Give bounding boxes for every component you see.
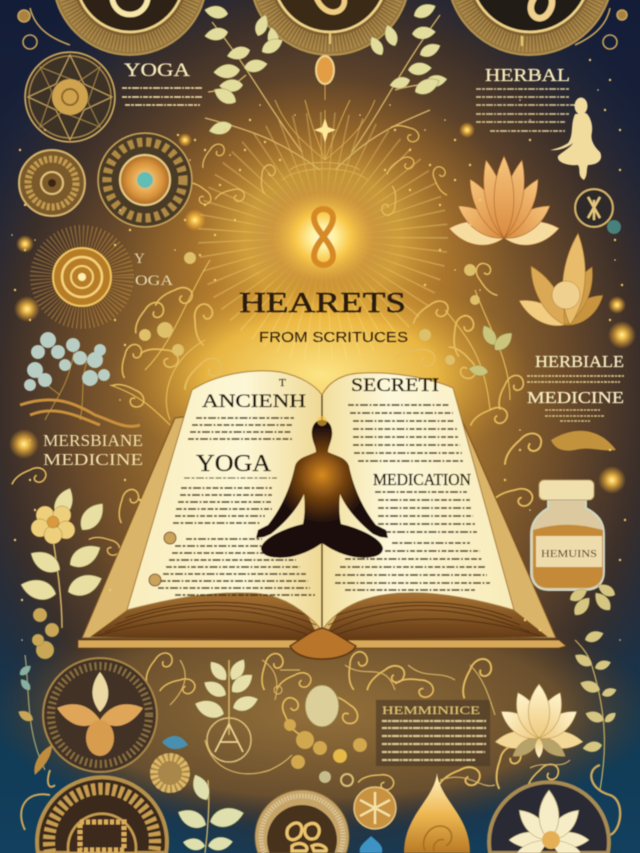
icon: small wheel — [354, 787, 396, 829]
left page text lines — [158, 418, 315, 595]
top medallions — [53, 0, 613, 55]
medallion: yoga star — [25, 52, 115, 142]
book cover — [78, 640, 566, 648]
flower seed head — [150, 753, 190, 793]
book headings: SECRETI — [351, 376, 439, 396]
bottom medallion: glyph — [255, 790, 349, 853]
root decoration right — [551, 431, 616, 451]
back pages — [82, 400, 556, 638]
open book — [78, 371, 566, 659]
flowers: pale blue cluster — [24, 332, 110, 420]
bottom seed — [305, 685, 339, 727]
sun rays and central glow — [245, 167, 401, 307]
bottom medallion: engraved seal — [37, 777, 167, 853]
page stack right — [323, 591, 548, 640]
icon: golden oil drop — [404, 773, 470, 853]
foliage: right side — [567, 581, 618, 790]
text block: herbal caption — [476, 89, 575, 131]
book headings: YOGA — [196, 451, 272, 477]
glowing orbs — [9, 122, 636, 494]
note heading: HEMMINIICE — [382, 703, 480, 717]
gutter — [321, 395, 323, 632]
icon: blue ornament — [360, 836, 382, 853]
heading: herbal: HERBAL — [485, 65, 570, 85]
heading: mersbiane medicine left: MEDICINE — [43, 450, 143, 469]
page stack left — [90, 591, 320, 640]
scroll ornament right — [591, 765, 620, 835]
gold floral cluster — [284, 719, 367, 786]
page edge lines — [97, 602, 540, 638]
bottom plant with emblem — [192, 656, 292, 774]
icon: orange lotus — [447, 156, 561, 249]
icon: seated cream figure — [550, 98, 601, 180]
golden dust and sparkles — [12, 60, 625, 640]
icon: small round symbol — [575, 189, 613, 227]
meditating silhouette — [256, 416, 388, 558]
icon: golden lotus — [515, 232, 608, 333]
text block: yoga caption — [122, 88, 203, 105]
bottom right lotus — [494, 684, 584, 762]
gold filigree scrolls — [12, 119, 560, 804]
medallion: top left — [53, 0, 207, 55]
heading: herbiale medicine right — [527, 352, 624, 421]
medallion: top right — [447, 0, 613, 55]
right page text lines — [335, 405, 490, 590]
heading: herbiale medicine right: MEDICINE — [527, 388, 624, 407]
corner ornaments — [18, 8, 627, 49]
heading: mersbiane medicine left: MERSBIANE — [43, 431, 143, 450]
medallion: top centre — [250, 0, 410, 55]
medallion: small mandala — [19, 150, 85, 216]
heading: herbiale medicine right: HERBIALE — [535, 352, 624, 371]
subtitle: FROM SCRITUCES — [259, 329, 408, 346]
bottom scattered ornaments — [170, 660, 570, 786]
medallion: turquoise eye — [98, 133, 192, 227]
label: split yoga: OGA — [135, 273, 173, 289]
medallion: glowing sun disc — [42, 237, 122, 317]
heading: mersbiane medicine left — [43, 431, 143, 469]
vines and leaves: right branch — [335, 0, 448, 170]
icon: blue bird — [162, 736, 188, 749]
root decoration left — [20, 400, 140, 426]
book headings — [196, 376, 471, 489]
book headings: ANCIENH — [202, 391, 306, 412]
bottom medallion: white lotus — [489, 782, 609, 853]
heading: yoga: YOGA — [124, 61, 191, 81]
title: heart secrets: HEARETS — [239, 288, 406, 319]
vines and leaves: left branch — [203, 4, 320, 170]
plant: left flowering leaves — [18, 485, 109, 628]
jar of herbal powder — [531, 480, 604, 590]
bottom medallion: orchid — [43, 658, 157, 772]
foliage: left side — [16, 608, 59, 830]
label: split yoga: Y — [134, 251, 145, 267]
text block: bottom herbal note — [376, 700, 490, 766]
foliage: gold vines beside title — [110, 252, 516, 425]
book headings: MEDICATION — [373, 470, 471, 489]
leaves: bottom centre plant — [175, 772, 246, 853]
right page — [322, 373, 514, 630]
clasp — [290, 628, 356, 659]
jar label: HEMUINS — [541, 548, 597, 560]
central ornament and fan — [275, 56, 375, 180]
small seals on pages — [149, 532, 176, 586]
label: split yoga — [134, 251, 173, 289]
icon: central infinity symbol — [314, 209, 333, 265]
book headings: T — [279, 377, 286, 389]
teal accent glow — [607, 220, 621, 234]
left page — [127, 371, 322, 630]
